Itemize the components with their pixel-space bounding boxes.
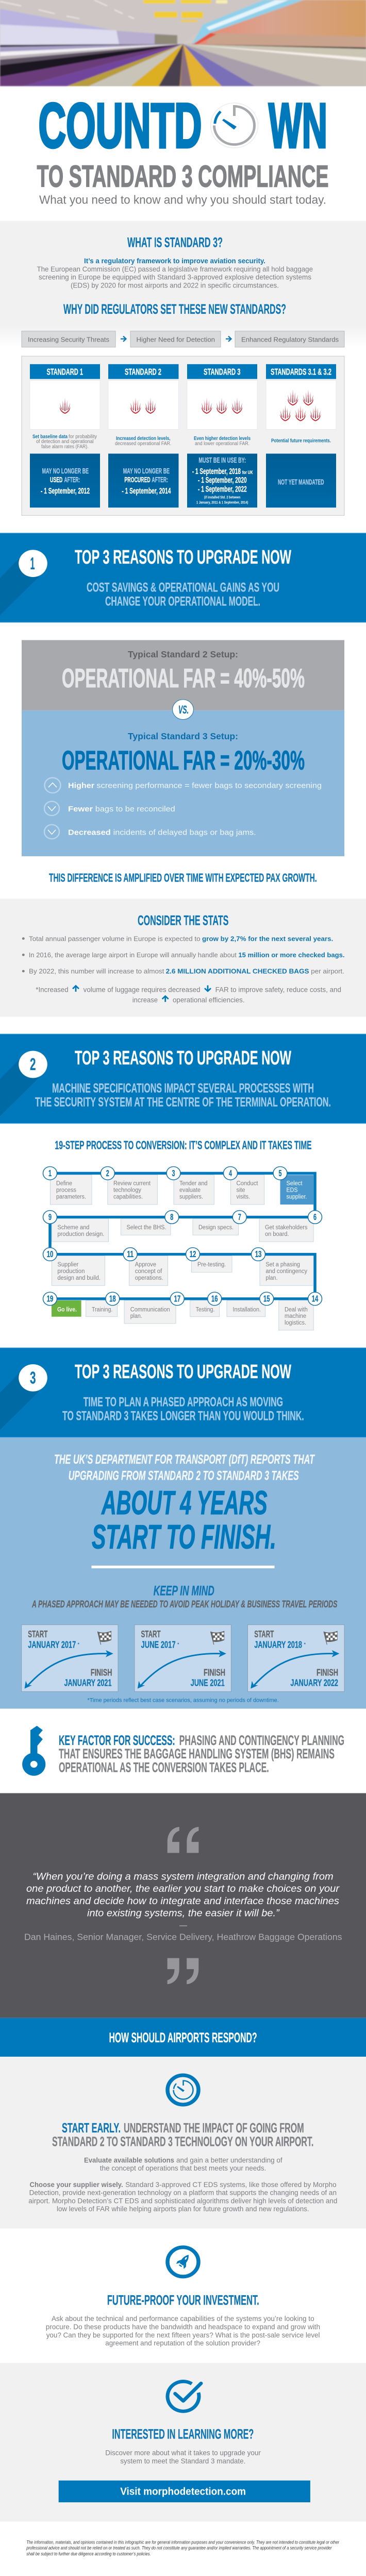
stat 2 — [22, 951, 345, 959]
button: visit morphodetection.com — [59, 2481, 310, 2502]
stat 1 — [22, 935, 333, 942]
timeline card: June 2017: * — [177, 1642, 179, 1647]
benefit: decreased incidents: incidents of delayed bags or bag jams. — [113, 828, 256, 837]
step 10: production — [57, 1268, 85, 1275]
heading: consider the stats: CONSIDER THE STATS — [138, 912, 228, 928]
quote text — [26, 1871, 340, 1919]
step 18: Training. — [92, 1306, 112, 1313]
step 10: 10 — [47, 1249, 54, 1259]
column: standard 1: for probability — [69, 434, 97, 439]
column: standards 3.1 and 3.2: Potential future requirements. — [271, 438, 331, 444]
step 14: logistics. — [285, 1319, 306, 1326]
step 1 — [43, 1166, 92, 1205]
keep in mind: KEEP IN MIND — [154, 1583, 214, 1598]
step 15 — [227, 1292, 274, 1317]
step 6 — [259, 1211, 322, 1242]
reason text: CHANGE YOUR OPERATIONAL MODEL. — [105, 595, 260, 608]
column: standard 1: - 1 September, 2012 — [41, 486, 90, 496]
column: standard 2: PROCURED — [124, 476, 151, 484]
step 4 — [224, 1166, 264, 1205]
flow: threats to standards: Increasing Security Threats — [28, 336, 109, 344]
hero photo: airport moving walkway — [0, 0, 366, 86]
legal disclaimer: shall be subject to further due diligence according to customer’s policies. — [26, 2551, 151, 2556]
column: standard 2: - 1 September, 2014 — [122, 486, 171, 496]
timeline card: January 2018: * — [304, 1642, 306, 1647]
text: choose your supplier wisely: Detection, provide next-generation technology on a platform that supports the changing needs of an — [29, 2189, 337, 2197]
icon: closing quote mark — [168, 1958, 198, 1984]
step 9: 9 — [48, 1212, 52, 1222]
step 15: Installation. — [233, 1306, 261, 1313]
timeline card: January 2017: JANUARY 2021 — [64, 1678, 112, 1688]
step 14: Deal with — [285, 1306, 308, 1313]
step 11 — [123, 1248, 168, 1285]
column: standards 3.1 and 3.2 — [266, 364, 336, 507]
banner: how should airports respond: HOW SHOULD AIRPORTS RESPOND? — [109, 2030, 257, 2045]
step 4: visits. — [237, 1193, 250, 1200]
flow: threats to standards: Higher Need for Detection — [136, 336, 215, 344]
reason text — [62, 1395, 304, 1423]
step 6: Get stakeholders — [265, 1224, 307, 1231]
stat 1: Total annual passenger volume in Europe is expected to — [29, 935, 201, 942]
definition text — [37, 257, 313, 289]
column: standard 3: for UK — [242, 470, 253, 476]
column: standard 3 — [187, 364, 257, 507]
text: evaluate available solutions — [84, 2156, 282, 2172]
benefit: fewer bags — [44, 801, 175, 816]
step 10: design and build. — [57, 1274, 101, 1281]
heading: start early: START EARLY. — [62, 2121, 121, 2136]
number badge 2: 2 — [30, 1055, 36, 1074]
timeline card: January 2017: START — [28, 1629, 48, 1640]
icon: opening quote mark — [168, 1827, 198, 1853]
step 1: parameters. — [56, 1193, 86, 1200]
panel: timeline — [0, 1437, 366, 1709]
step 19: go live: 19 — [47, 1294, 54, 1303]
step 14: machine — [285, 1312, 306, 1319]
icon: rocket — [168, 2247, 198, 2277]
text: discover more — [105, 2449, 261, 2465]
step 14 — [279, 1292, 322, 1330]
stat 1: grow by 2,7% for the next several years. — [202, 935, 333, 942]
quote text: into existing systems, the easier it will be.” — [87, 1908, 280, 1919]
reason text — [87, 581, 279, 608]
benefit: higher performance: Higher — [68, 782, 94, 790]
step 9: production design. — [57, 1230, 104, 1238]
column: standard 2: Increased detection levels, — [116, 436, 171, 442]
stat 3: By 2022, this number will increase to almost — [29, 968, 164, 975]
button: visit morphodetection.com: Visit morphodetection.com — [120, 2486, 246, 2498]
step 17 — [124, 1292, 184, 1324]
quote text: “When you’re doing a mass system integration and changing from — [32, 1871, 334, 1882]
panel: standard 2 false alarm rate — [22, 640, 344, 710]
definition text: It’s a regulatory framework to improve aviation security. — [84, 257, 265, 265]
timeline card: January 2018: JANUARY 2018 — [254, 1640, 302, 1650]
step 8 — [121, 1211, 179, 1235]
timeline card: January 2017: * — [77, 1642, 80, 1647]
column: standard 1 — [30, 364, 100, 507]
timeline card: January 2018: JANUARY 2022 — [290, 1678, 338, 1688]
column: standard 1: USED — [50, 476, 62, 484]
benefit: decreased incidents: Decreased — [68, 828, 111, 837]
text: evaluate available solutions: the concept of operations that best meets your needs. — [100, 2164, 266, 2172]
column: standard 3: - 1 September, 2018 — [192, 466, 241, 476]
footnote with arrows: volume of luggage requires decreased — [84, 986, 201, 993]
column: standard 2: decreased operational FAR. — [115, 441, 171, 447]
definition text: screening in Europe be equipped with Standard 3-approved explosive detection systems — [39, 273, 311, 281]
panel: consider the stats — [0, 899, 366, 1017]
column: standard 2 — [108, 364, 178, 507]
text: choose your supplier wisely: airport. Morpho Detection’s CT EDS and sophisticated algorithms deliver high levels of detection and — [28, 2197, 337, 2205]
step 8: Select the BHS. — [127, 1224, 167, 1231]
footnote with arrows — [36, 985, 341, 1004]
panel: standard 2 false alarm rate: Typical Standard 2 Setup: — [128, 649, 238, 659]
stat 3 — [22, 968, 344, 975]
column: standard 3: - 1 September, 2020 — [198, 475, 247, 485]
timeline card: January 2018 — [247, 1625, 344, 1691]
tagline: What you need to know and why you should start today. — [39, 193, 326, 206]
definition text: (EDS) by 2020 for most airports and 2022 in specific circumstances. — [71, 281, 279, 289]
number badge 1: 1 — [30, 554, 35, 573]
column: standard 1: AFTER: — [64, 476, 80, 484]
step 3: 3 — [172, 1168, 175, 1178]
step 13: and contingency — [265, 1268, 308, 1275]
stat 3: 2.6 MILLION ADDITIONAL CHECKED BAGS — [166, 968, 309, 975]
footnote with arrows: increase — [132, 996, 158, 1004]
heading: interested: INTERESTED IN LEARNING MORE? — [112, 2426, 254, 2442]
step 18: 18 — [109, 1294, 116, 1303]
process diagram: 19 steps — [43, 1166, 322, 1330]
quote attribution: Dan Haines, Senior Manager, Service Delivery, Heathrow Baggage Operations — [24, 1932, 342, 1942]
step 13 — [252, 1248, 313, 1285]
DfT statement — [54, 1453, 315, 1483]
timeline card: January 2018: START — [254, 1629, 274, 1640]
column: standard 2: MAY NO LONGER BE — [123, 467, 170, 476]
quote text: one product to another, the earlier you start to make choices on your — [26, 1884, 340, 1894]
number badge 1 — [19, 550, 47, 577]
definition text: The European Commission (EC) passed a legislative framework requiring all hold baggage — [37, 265, 313, 273]
flow: threats to standards — [22, 331, 344, 347]
text: future-proof details: Ask about the technical and performance capabilities of the systems you’re looking to — [52, 2315, 314, 2323]
step 7: Design specs. — [198, 1224, 234, 1231]
key factor for success: KEY FACTOR FOR SUCCESS: — [59, 1732, 175, 1748]
step 5: select EDS supplier: supplier. — [287, 1193, 307, 1200]
step 16: Testing. — [196, 1306, 215, 1313]
column: standard 3: - 1 September, 2022 — [198, 484, 247, 494]
timeline card: June 2017: FINISH — [204, 1668, 225, 1678]
benefit: fewer bags: Fewer — [68, 805, 93, 814]
panel: start early — [0, 2057, 366, 2228]
text: discover more: Discover more about what it takes to upgrade your — [105, 2449, 261, 2457]
banner: reason 2 — [0, 1033, 366, 1124]
flow: threats to standards: Enhanced Regulatory Standards — [241, 336, 339, 344]
stat 2: In 2016, the average large airport in Europe will annually handle about — [29, 951, 237, 959]
panel: standard 3 false alarm rate — [22, 710, 344, 856]
step 6: on board. — [265, 1230, 289, 1238]
step 13: Set a phasing — [265, 1261, 300, 1268]
text: future-proof details: agreement and reputation of the solution provider? — [105, 2339, 260, 2347]
panel: standards comparison — [22, 356, 344, 515]
column: standard 3: (if installed Std. 2 between — [204, 495, 241, 499]
step 2 — [101, 1166, 157, 1205]
step 18 — [86, 1292, 120, 1317]
step 5: select EDS supplier: EDS — [287, 1187, 297, 1194]
banner: reason 3 — [0, 1348, 366, 1437]
vs badge: VS. — [178, 704, 189, 716]
timeline card: January 2017 — [22, 1625, 118, 1691]
step 16: 16 — [211, 1294, 218, 1303]
stat 3: per airport. — [311, 968, 344, 975]
step 12: 12 — [190, 1249, 196, 1259]
column: standard 1: MAY NO LONGER BE — [42, 467, 89, 476]
step 1: Define — [56, 1180, 72, 1187]
step 13: plan. — [265, 1274, 277, 1281]
step 3: evaluate — [179, 1187, 201, 1194]
step 2: technology — [113, 1187, 142, 1194]
text: choose your supplier wisely: low levels of FAR while helping airports plan for future growth and new regulations. — [57, 2205, 309, 2213]
step 16 — [190, 1292, 222, 1317]
step 12: Pre-testing. — [197, 1261, 226, 1268]
text: choose your supplier wisely — [28, 2180, 337, 2213]
heading: what is standard 3: WHAT IS STANDARD 3? — [127, 234, 223, 250]
timeline card: June 2017: JUNE 2021 — [191, 1678, 225, 1688]
column: standard 3: STANDARD 3 — [204, 367, 241, 377]
footnote with arrows: *Increased — [36, 986, 69, 993]
panel: what is standard 3 — [0, 221, 366, 347]
icon: check mark — [168, 2381, 201, 2411]
banner: reason 1 — [0, 533, 366, 623]
step 13: 13 — [255, 1249, 262, 1259]
quote text: machines and decide how to integrate and interface those machines — [26, 1895, 339, 1907]
step 14: 14 — [312, 1294, 319, 1303]
column: standard 1: STANDARD 1 — [47, 367, 83, 377]
timeline card: January 2017: JANUARY 2017 — [28, 1640, 76, 1650]
column: standard 2: AFTER: — [152, 476, 168, 484]
column: standard 3: MUST BE IN USE BY: — [198, 456, 246, 465]
step 3: suppliers. — [179, 1193, 203, 1200]
step 11: operations. — [135, 1274, 163, 1281]
text: choose your supplier wisely: Choose your supplier wisely. — [30, 2180, 123, 2189]
timeline card: January 2018: FINISH — [317, 1668, 338, 1678]
step 15: 15 — [263, 1294, 270, 1303]
heading: future-proof your investment: FUTURE-PROOF YOUR INVESTMENT. — [107, 2292, 259, 2308]
key factor for success — [59, 1732, 344, 1775]
text: choose your supplier wisely: Standard 3-approved CT EDS systems, like those offered by Morpho — [125, 2180, 337, 2189]
step 7 — [193, 1211, 246, 1235]
stat 2: 15 million or more checked bags. — [238, 951, 345, 959]
title: Countdown: COUNTD — [39, 90, 202, 161]
step 1: 1 — [48, 1168, 52, 1178]
step 19: go live — [43, 1292, 81, 1317]
panel: customer quote — [0, 1793, 366, 2018]
big statement: about 4 years start to finish — [92, 1485, 276, 1556]
legal disclaimer — [26, 2540, 340, 2556]
step 8: 8 — [170, 1212, 173, 1222]
panel: standard 3 false alarm rate: Typical Standard 3 Setup: — [128, 731, 238, 741]
text: future-proof details: you? Can they be supported for the next fifteen years? What is the post-sale service level — [46, 2331, 320, 2339]
step 4: Conduct — [237, 1180, 258, 1187]
icon: key — [22, 1726, 45, 1776]
heading: start early — [52, 2121, 313, 2149]
step 17: Communication — [130, 1306, 170, 1313]
timeline card: June 2017: START — [141, 1629, 161, 1640]
footnote with arrows: operational efficiencies. — [173, 996, 245, 1004]
step 3: Tender and — [179, 1180, 208, 1187]
column: standard 3: Even higher detection levels — [194, 436, 251, 442]
step 4: site — [237, 1187, 245, 1194]
column: standard 3: and lower operational FAR. — [195, 441, 249, 447]
step 10: Supplier — [57, 1261, 78, 1268]
column: standard 1: false alarm rates (FAR). — [41, 444, 89, 450]
step 5: select EDS supplier: 5 — [278, 1168, 282, 1178]
step 10 — [43, 1248, 105, 1285]
step 11: concept of — [135, 1268, 162, 1275]
benefit: fewer bags: bags to be reconciled — [95, 805, 175, 814]
keep in mind — [31, 1583, 338, 1610]
column: standards 3.1 and 3.2: NOT YET MANDATED — [278, 478, 324, 486]
banner: how should airports respond — [0, 2018, 366, 2057]
timeline card: June 2017: JUNE 2017 — [141, 1640, 176, 1650]
step 5: select EDS supplier — [273, 1166, 313, 1205]
icon: stopwatch — [168, 2075, 198, 2105]
step 2: capabilities. — [113, 1193, 143, 1200]
benefit: higher performance: screening performance = fewer bags to secondary screening — [97, 782, 322, 790]
step 9 — [43, 1211, 109, 1242]
step 5: select EDS supplier: Select — [287, 1180, 303, 1187]
step 9: Scheme and — [57, 1224, 89, 1231]
benefit: decreased incidents — [44, 825, 256, 839]
benefit: higher performance — [44, 778, 322, 793]
step 11: Approve — [135, 1261, 156, 1268]
step 2: 2 — [106, 1168, 109, 1178]
text: future-proof details: procure. Do these products have the bandwidth and headspace to expand and grow with — [46, 2323, 320, 2331]
reason text — [35, 1081, 331, 1109]
timeline card: June 2017 — [135, 1625, 231, 1691]
step 2: Review current — [113, 1180, 151, 1187]
step 4: 4 — [229, 1168, 232, 1178]
step 12 — [186, 1248, 232, 1272]
text: evaluate available solutions: and gain a better understanding of — [176, 2156, 282, 2164]
step 1: process — [56, 1187, 76, 1194]
connector line — [50, 1173, 315, 1299]
column: standard 3: 1 January, 2011 & 1 September, 2014) — [196, 500, 248, 504]
text: evaluate available solutions: Evaluate available solutions — [84, 2156, 174, 2164]
column: standard 2: STANDARD 2 — [125, 367, 161, 377]
text: discover more: system to meet the Standard 3 mandate. — [120, 2458, 245, 2465]
number badge 3: 3 — [30, 1368, 36, 1387]
vs badge — [173, 700, 193, 720]
step 6: 6 — [313, 1212, 317, 1222]
timeline card: January 2017: FINISH — [91, 1668, 112, 1678]
number badge 2 — [19, 1051, 47, 1078]
number badge 3 — [19, 1364, 47, 1392]
step 3 — [167, 1166, 214, 1205]
footnote: *Time periods reflect best case scenarios, assuming no periods of downtime. — [87, 1698, 279, 1704]
text: future-proof details — [46, 2315, 320, 2347]
step 17: plan. — [130, 1312, 142, 1319]
panel: interested in learning more — [0, 2363, 366, 2521]
step 7: 7 — [238, 1212, 241, 1222]
icon: countdown timer letter O — [210, 103, 258, 148]
step 19: go live: Go live. — [57, 1306, 77, 1313]
footnote with arrows: FAR to improve safety, reduce costs, and — [215, 986, 341, 993]
column: standard 1: Set baseline data — [32, 434, 68, 439]
column: standard 1: of detection and operational — [36, 439, 94, 445]
step 17: 17 — [174, 1294, 180, 1303]
step 11: 11 — [127, 1249, 134, 1259]
